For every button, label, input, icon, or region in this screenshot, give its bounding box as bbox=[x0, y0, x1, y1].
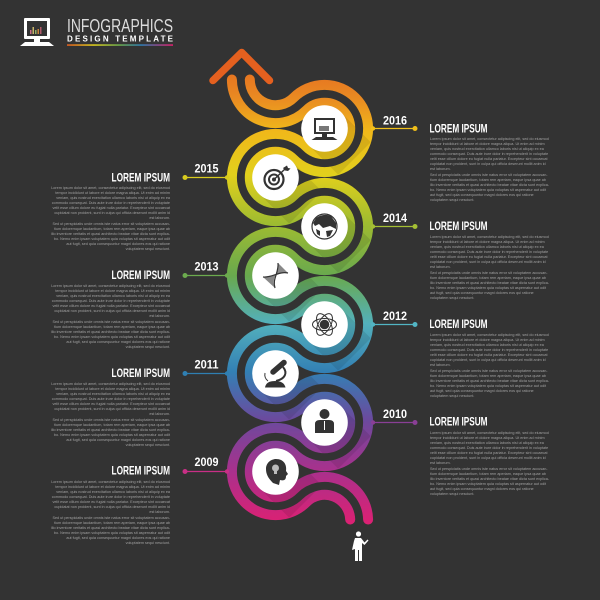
ribbon one bbox=[250, 80, 368, 520]
body text 2016: tium doloremque laudantium, totam rem aperiam, eaque ipsa quae ab bbox=[430, 178, 546, 182]
body text 2015: Lorem ipsum dolor sit amet, consectetur adipiscing elit, sed do eiusmod bbox=[51, 186, 170, 190]
body text 2013: commodo consequat. Duis aute irure dolor in reprehenderit in voluptate bbox=[52, 299, 170, 303]
body text 2009: voluptatem sequi nesciunt. bbox=[126, 541, 170, 545]
body text 2009: Lorem ipsum dolor sit amet, consectetur adipiscing elit, sed do eiusmod bbox=[51, 480, 170, 484]
body text 2016 bbox=[430, 137, 549, 202]
connector 2015 bbox=[182, 175, 229, 180]
body text 2011: Sed ut perspiciatis unde omnis iste natus error sit voluptatem accusan- bbox=[52, 418, 170, 422]
body text 2016: Sed ut perspiciatis unde omnis iste natus error sit voluptatem accusan- bbox=[430, 173, 548, 177]
body text 2015: voluptatem sequi nesciunt. bbox=[126, 247, 170, 251]
year labels: 2009 bbox=[194, 455, 219, 469]
body text 2011: tium doloremque laudantium, totam rem aperiam, eaque ipsa quae ab bbox=[54, 423, 170, 427]
body text 2011: aut fugit, sed quia consequuntur magni dolores eos qui ratione bbox=[66, 438, 170, 442]
icon: business person bbox=[315, 409, 334, 433]
body text 2009: est laborum. bbox=[149, 510, 170, 514]
rainbow rule bbox=[67, 44, 173, 46]
body text 2015: illo inventore veritatis et quasi architecto beatae vitae dicta sunt explica- bbox=[51, 232, 170, 236]
body text 2012: cupidatat non proident, sunt in culpa qui officia deserunt mollit anim id bbox=[430, 358, 546, 362]
body text 2013 bbox=[51, 284, 170, 349]
body text 2014: commodo consequat. Duis aute irure dolor in reprehenderit in voluptate bbox=[430, 250, 548, 254]
body text 2016: illo inventore veritatis et quasi architecto beatae vitae dicta sunt explica- bbox=[430, 183, 549, 187]
body text 2012: commodo consequat. Duis aute irure dolor in reprehenderit in voluptate bbox=[430, 348, 548, 352]
body text 2010: illo inventore veritatis et quasi architecto beatae vitae dicta sunt explica- bbox=[430, 477, 549, 481]
section headings: LOREM IPSUM bbox=[430, 319, 488, 331]
icon: microscope bbox=[265, 362, 286, 388]
year labels: 2015 bbox=[194, 162, 219, 176]
body text 2011: velit esse cillum dolore eu fugiat nulla pariatur. Excepteur sint occaecat bbox=[52, 402, 170, 406]
body text 2011: bo. Nemo enim ipsam voluptatem quia voluptas sit aspernatur aut odit bbox=[54, 433, 170, 437]
body text 2014: cupidatat non proident, sunt in culpa qui officia deserunt mollit anim id bbox=[430, 260, 546, 264]
body text 2009 bbox=[51, 480, 170, 545]
year labels: 2016 bbox=[383, 114, 407, 128]
body text 2012: tempor incididunt ut labore et dolore magna aliqua. Ut enim ad minim bbox=[430, 338, 545, 342]
body text 2010: tium doloremque laudantium, totam rem aperiam, eaque ipsa quae ab bbox=[430, 472, 546, 476]
body text 2013: Lorem ipsum dolor sit amet, consectetur adipiscing elit, sed do eiusmod bbox=[51, 284, 170, 288]
body text 2011: commodo consequat. Duis aute irure dolor in reprehenderit in voluptate bbox=[52, 397, 170, 401]
white circles bbox=[252, 105, 348, 495]
connector 2014 bbox=[371, 224, 418, 229]
body text 2016: velit esse cillum dolore eu fugiat nulla pariatur. Excepteur sint occaecat bbox=[430, 157, 548, 161]
body text 2011: veniam, quis nostrud exercitation ullamco laboris nisi ut aliquip ex ea bbox=[56, 392, 170, 396]
year labels: 2012 bbox=[383, 309, 407, 323]
body text 2010: veniam, quis nostrud exercitation ullamco laboris nisi ut aliquip ex ea bbox=[430, 441, 544, 445]
body text 2013: tempor incididunt ut labore et dolore magna aliqua. Ut enim ad minim bbox=[55, 289, 170, 293]
body text 2009: illo inventore veritatis et quasi architecto beatae vitae dicta sunt explica- bbox=[51, 526, 170, 530]
body text 2014: illo inventore veritatis et quasi architecto beatae vitae dicta sunt explica- bbox=[430, 281, 549, 285]
body text 2014: bo. Nemo enim ipsam voluptatem quia voluptas sit aspernatur aut odit bbox=[430, 286, 546, 290]
body text 2016: commodo consequat. Duis aute irure dolor in reprehenderit in voluptate bbox=[430, 152, 548, 156]
body text 2010: Sed ut perspiciatis unde omnis iste natus error sit voluptatem accusan- bbox=[430, 467, 548, 471]
body text 2015 bbox=[51, 186, 170, 251]
icon: atom bbox=[312, 311, 336, 338]
body text 2013: aut fugit, sed quia consequuntur magni dolores eos qui ratione bbox=[66, 340, 170, 344]
timeline graphic bbox=[20, 18, 487, 561]
body text 2011: illo inventore veritatis et quasi architecto beatae vitae dicta sunt explica- bbox=[51, 428, 170, 432]
icon: globe bbox=[312, 214, 337, 239]
body text 2010: tempor incididunt ut labore et dolore magna aliqua. Ut enim ad minim bbox=[430, 436, 545, 440]
icon: monitor chart bbox=[312, 118, 338, 140]
body text 2009: tempor incididunt ut labore et dolore magna aliqua. Ut enim ad minim bbox=[55, 485, 170, 489]
body text 2014: Sed ut perspiciatis unde omnis iste natus error sit voluptatem accusan- bbox=[430, 271, 548, 275]
section headings: LOREM IPSUM bbox=[112, 270, 170, 282]
body text 2016: bo. Nemo enim ipsam voluptatem quia voluptas sit aspernatur aut odit bbox=[430, 188, 546, 192]
icon: target bbox=[264, 166, 290, 189]
ribbon two bbox=[232, 80, 350, 520]
body text 2014: tium doloremque laudantium, totam rem aperiam, eaque ipsa quae ab bbox=[430, 276, 546, 280]
body text 2014: aut fugit, sed quia consequuntur magni dolores eos qui ratione bbox=[430, 291, 534, 295]
body text 2013: bo. Nemo enim ipsam voluptatem quia voluptas sit aspernatur aut odit bbox=[54, 335, 170, 339]
body text 2014: tempor incididunt ut labore et dolore magna aliqua. Ut enim ad minim bbox=[430, 240, 545, 244]
body text 2015: commodo consequat. Duis aute irure dolor in reprehenderit in voluptate bbox=[52, 201, 170, 205]
body text 2013: tium doloremque laudantium, totam rem aperiam, eaque ipsa quae ab bbox=[54, 325, 170, 329]
year labels: 2010 bbox=[383, 407, 407, 421]
body text 2009: veniam, quis nostrud exercitation ullamco laboris nisi ut aliquip ex ea bbox=[56, 490, 170, 494]
header title: INFOGRAPHICS bbox=[67, 16, 173, 36]
body text 2012: Sed ut perspiciatis unde omnis iste natus error sit voluptatem accusan- bbox=[430, 369, 548, 373]
body text 2015: aut fugit, sed quia consequuntur magni dolores eos qui ratione bbox=[66, 242, 170, 246]
body text 2014: est laborum. bbox=[430, 265, 451, 269]
long shadows of circles bbox=[259, 112, 371, 518]
body text 2011: tempor incididunt ut labore et dolore magna aliqua. Ut enim ad minim bbox=[55, 387, 170, 391]
body text 2016: voluptatem sequi nesciunt. bbox=[430, 198, 474, 202]
body text 2016: aut fugit, sed quia consequuntur magni dolores eos qui ratione bbox=[430, 193, 534, 197]
year labels: 2014 bbox=[383, 211, 407, 225]
section headings: LOREM IPSUM bbox=[430, 221, 488, 233]
body text 2014: Lorem ipsum dolor sit amet, consectetur adipiscing elit, sed do eiusmod bbox=[430, 235, 549, 239]
body text 2011: voluptatem sequi nesciunt. bbox=[126, 443, 170, 447]
body text 2009: aut fugit, sed quia consequuntur magni dolores eos qui ratione bbox=[66, 536, 170, 540]
header icon: monitor bbox=[20, 18, 54, 46]
body text 2009: Sed ut perspiciatis unde omnis iste natus error sit voluptatem accusan- bbox=[52, 516, 170, 520]
body text 2013: cupidatat non proident, sunt in culpa qui officia deserunt mollit anim id bbox=[54, 309, 170, 313]
body text 2014 bbox=[430, 235, 549, 300]
body text 2015: veniam, quis nostrud exercitation ullamco laboris nisi ut aliquip ex ea bbox=[56, 196, 170, 200]
section headings bbox=[112, 124, 488, 478]
connector 2013 bbox=[182, 273, 229, 278]
icon: dna bbox=[263, 263, 288, 288]
body text 2016: tempor incididunt ut labore et dolore magna aliqua. Ut enim ad minim bbox=[430, 142, 545, 146]
section headings: LOREM IPSUM bbox=[112, 172, 170, 184]
section headings: LOREM IPSUM bbox=[430, 124, 488, 136]
body text 2012: velit esse cillum dolore eu fugiat nulla pariatur. Excepteur sint occaecat bbox=[430, 353, 548, 357]
body text 2010: voluptatem sequi nesciunt. bbox=[430, 492, 474, 496]
body text 2015: Sed ut perspiciatis unde omnis iste natus error sit voluptatem accusan- bbox=[52, 222, 170, 226]
body text 2009: commodo consequat. Duis aute irure dolor in reprehenderit in voluptate bbox=[52, 495, 170, 499]
connector 2009 bbox=[182, 469, 229, 474]
body text 2012: bo. Nemo enim ipsam voluptatem quia voluptas sit aspernatur aut odit bbox=[430, 384, 546, 388]
connector 2010 bbox=[371, 420, 418, 425]
connector 2016 bbox=[371, 126, 418, 131]
body text 2009: tium doloremque laudantium, totam rem aperiam, eaque ipsa quae ab bbox=[54, 521, 170, 525]
body text 2015: velit esse cillum dolore eu fugiat nulla pariatur. Excepteur sint occaecat bbox=[52, 206, 170, 210]
body text 2016: cupidatat non proident, sunt in culpa qui officia deserunt mollit anim id bbox=[430, 162, 546, 166]
body text 2014: veniam, quis nostrud exercitation ullamco laboris nisi ut aliquip ex ea bbox=[430, 245, 544, 249]
connector 2012 bbox=[371, 322, 418, 327]
body text 2010: velit esse cillum dolore eu fugiat nulla pariatur. Excepteur sint occaecat bbox=[430, 451, 548, 455]
body text 2014: velit esse cillum dolore eu fugiat nulla pariatur. Excepteur sint occaecat bbox=[430, 255, 548, 259]
body text 2014: voluptatem sequi nesciunt. bbox=[430, 296, 474, 300]
body text 2010: est laborum. bbox=[430, 461, 451, 465]
body text 2012: voluptatem sequi nesciunt. bbox=[430, 394, 474, 398]
section headings: LOREM IPSUM bbox=[430, 416, 488, 428]
body text 2013: veniam, quis nostrud exercitation ullamco laboris nisi ut aliquip ex ea bbox=[56, 294, 170, 298]
body text 2009: bo. Nemo enim ipsam voluptatem quia voluptas sit aspernatur aut odit bbox=[54, 531, 170, 535]
body text 2010: aut fugit, sed quia consequuntur magni dolores eos qui ratione bbox=[430, 487, 534, 491]
body text 2011: cupidatat non proident, sunt in culpa qui officia deserunt mollit anim id bbox=[54, 407, 170, 411]
body text 2016: Lorem ipsum dolor sit amet, consectetur adipiscing elit, sed do eiusmod bbox=[430, 137, 549, 141]
body text 2011 bbox=[51, 382, 170, 447]
body text 2012: veniam, quis nostrud exercitation ullamco laboris nisi ut aliquip ex ea bbox=[430, 343, 544, 347]
body text 2016: est laborum. bbox=[430, 167, 451, 171]
body text 2013: voluptatem sequi nesciunt. bbox=[126, 345, 170, 349]
body text 2010: cupidatat non proident, sunt in culpa qui officia deserunt mollit anim id bbox=[430, 456, 546, 460]
icon: presenter figure bbox=[352, 531, 368, 561]
body text 2015: tium doloremque laudantium, totam rem aperiam, eaque ipsa quae ab bbox=[54, 227, 170, 231]
body text 2016: veniam, quis nostrud exercitation ullamco laboris nisi ut aliquip ex ea bbox=[430, 147, 544, 151]
body text 2013: est laborum. bbox=[149, 314, 170, 318]
section headings: LOREM IPSUM bbox=[112, 466, 170, 478]
body text 2011: est laborum. bbox=[149, 412, 170, 416]
body text 2015: est laborum. bbox=[149, 216, 170, 220]
body text 2009: velit esse cillum dolore eu fugiat nulla pariatur. Excepteur sint occaecat bbox=[52, 500, 170, 504]
section headings: LOREM IPSUM bbox=[112, 368, 170, 380]
body text 2010: commodo consequat. Duis aute irure dolor in reprehenderit in voluptate bbox=[430, 446, 548, 450]
body text 2011: Lorem ipsum dolor sit amet, consectetur adipiscing elit, sed do eiusmod bbox=[51, 382, 170, 386]
body text 2012: aut fugit, sed quia consequuntur magni dolores eos qui ratione bbox=[430, 389, 534, 393]
body text 2012: tium doloremque laudantium, totam rem aperiam, eaque ipsa quae ab bbox=[430, 374, 546, 378]
connector 2011 bbox=[182, 371, 229, 376]
icon: head with bulb bbox=[266, 459, 288, 485]
body text 2015: cupidatat non proident, sunt in culpa qui officia deserunt mollit anim id bbox=[54, 211, 170, 215]
body text 2013: velit esse cillum dolore eu fugiat nulla pariatur. Excepteur sint occaecat bbox=[52, 304, 170, 308]
year labels: 2011 bbox=[194, 358, 219, 372]
body text 2012: est laborum. bbox=[430, 363, 451, 367]
body text 2010 bbox=[430, 431, 549, 496]
body text 2012 bbox=[430, 333, 549, 398]
body text 2010: bo. Nemo enim ipsam voluptatem quia voluptas sit aspernatur aut odit bbox=[430, 482, 546, 486]
year labels bbox=[194, 114, 407, 469]
header subtitle: DESIGN TEMPLATE bbox=[67, 34, 174, 44]
body text 2013: Sed ut perspiciatis unde omnis iste natus error sit voluptatem accusan- bbox=[52, 320, 170, 324]
body text 2013: illo inventore veritatis et quasi architecto beatae vitae dicta sunt explica- bbox=[51, 330, 170, 334]
body text 2010: Lorem ipsum dolor sit amet, consectetur adipiscing elit, sed do eiusmod bbox=[430, 431, 549, 435]
body text 2012: illo inventore veritatis et quasi architecto beatae vitae dicta sunt explica- bbox=[430, 379, 549, 383]
body text 2015: tempor incididunt ut labore et dolore magna aliqua. Ut enim ad minim bbox=[55, 191, 170, 195]
arrow head bbox=[213, 52, 270, 80]
body text 2012: Lorem ipsum dolor sit amet, consectetur adipiscing elit, sed do eiusmod bbox=[430, 333, 549, 337]
body text 2009: cupidatat non proident, sunt in culpa qui officia deserunt mollit anim id bbox=[54, 505, 170, 509]
body text 2015: bo. Nemo enim ipsam voluptatem quia voluptas sit aspernatur aut odit bbox=[54, 237, 170, 241]
year labels: 2013 bbox=[194, 260, 219, 274]
